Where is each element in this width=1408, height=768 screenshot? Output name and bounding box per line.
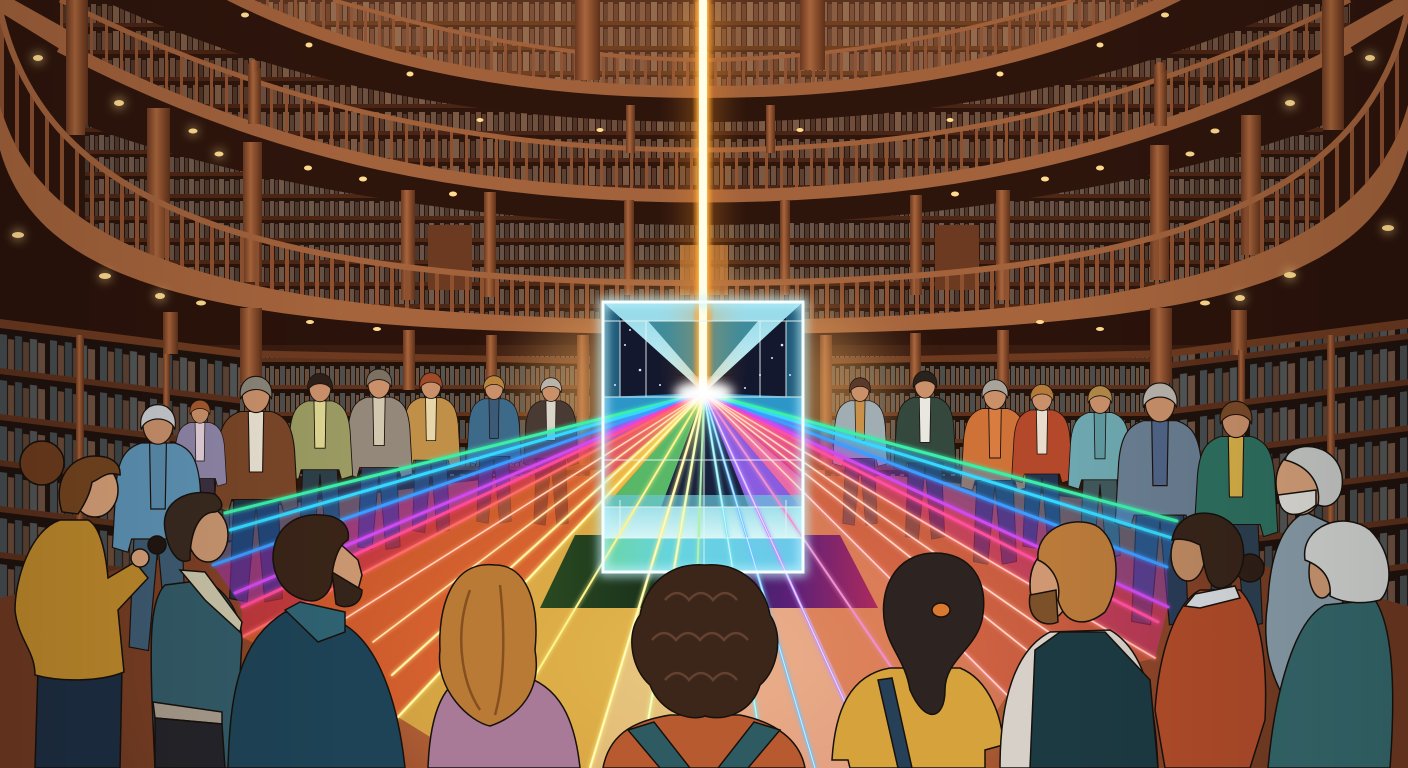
left lower bookshelves bbox=[0, 308, 590, 598]
second tier railing bbox=[60, 0, 1350, 190]
second tier band bbox=[0, 0, 1408, 196]
top tier railing bbox=[230, 0, 1178, 92]
second tier book wall bbox=[60, 0, 1350, 195]
person: teal jacket woman bbox=[148, 492, 242, 768]
person: mustard sweater woman bbox=[15, 441, 149, 768]
lower ceiling bbox=[0, 140, 1408, 430]
person: white bob hair woman bbox=[1268, 521, 1393, 768]
back row of people, left bbox=[112, 369, 578, 651]
central light flare bbox=[674, 381, 734, 405]
dark floor platform bbox=[540, 535, 878, 608]
third tier band bbox=[0, 105, 1408, 334]
vertical beam of light bbox=[684, 0, 722, 395]
prism rainbow wedges bbox=[603, 393, 803, 510]
person: ginger man with vest bbox=[1000, 522, 1158, 768]
prism outline bbox=[603, 302, 803, 572]
rainbow rays bbox=[213, 393, 1177, 768]
ceiling lights bbox=[12, 12, 1394, 331]
third tier railing bbox=[0, 10, 1408, 320]
person: long blond hair woman from behind bbox=[428, 565, 580, 768]
prism body bbox=[603, 302, 803, 572]
person: white haired bearded man bbox=[1266, 446, 1345, 700]
person: dark ponytail woman with yellow shirt bbox=[832, 553, 1003, 768]
right lower bookshelves bbox=[820, 308, 1408, 606]
person: dark teal jacket man from behind bbox=[228, 515, 405, 768]
stars bbox=[614, 329, 791, 389]
third tier book wall bbox=[85, 125, 1323, 345]
warm glow around prism bbox=[519, 290, 889, 510]
top tier band bbox=[230, 0, 1178, 92]
floor rainbow wash bbox=[213, 393, 1177, 768]
person: curly hair child with backpack bbox=[603, 565, 805, 768]
person: orange sweater woman with bun bbox=[1155, 513, 1266, 768]
floor bbox=[0, 470, 1408, 768]
back row of people, right bbox=[833, 371, 1278, 627]
third tier columns and doors bbox=[147, 108, 1261, 300]
top tier book wall bbox=[230, 0, 1178, 92]
upper columns bbox=[66, 0, 1344, 153]
